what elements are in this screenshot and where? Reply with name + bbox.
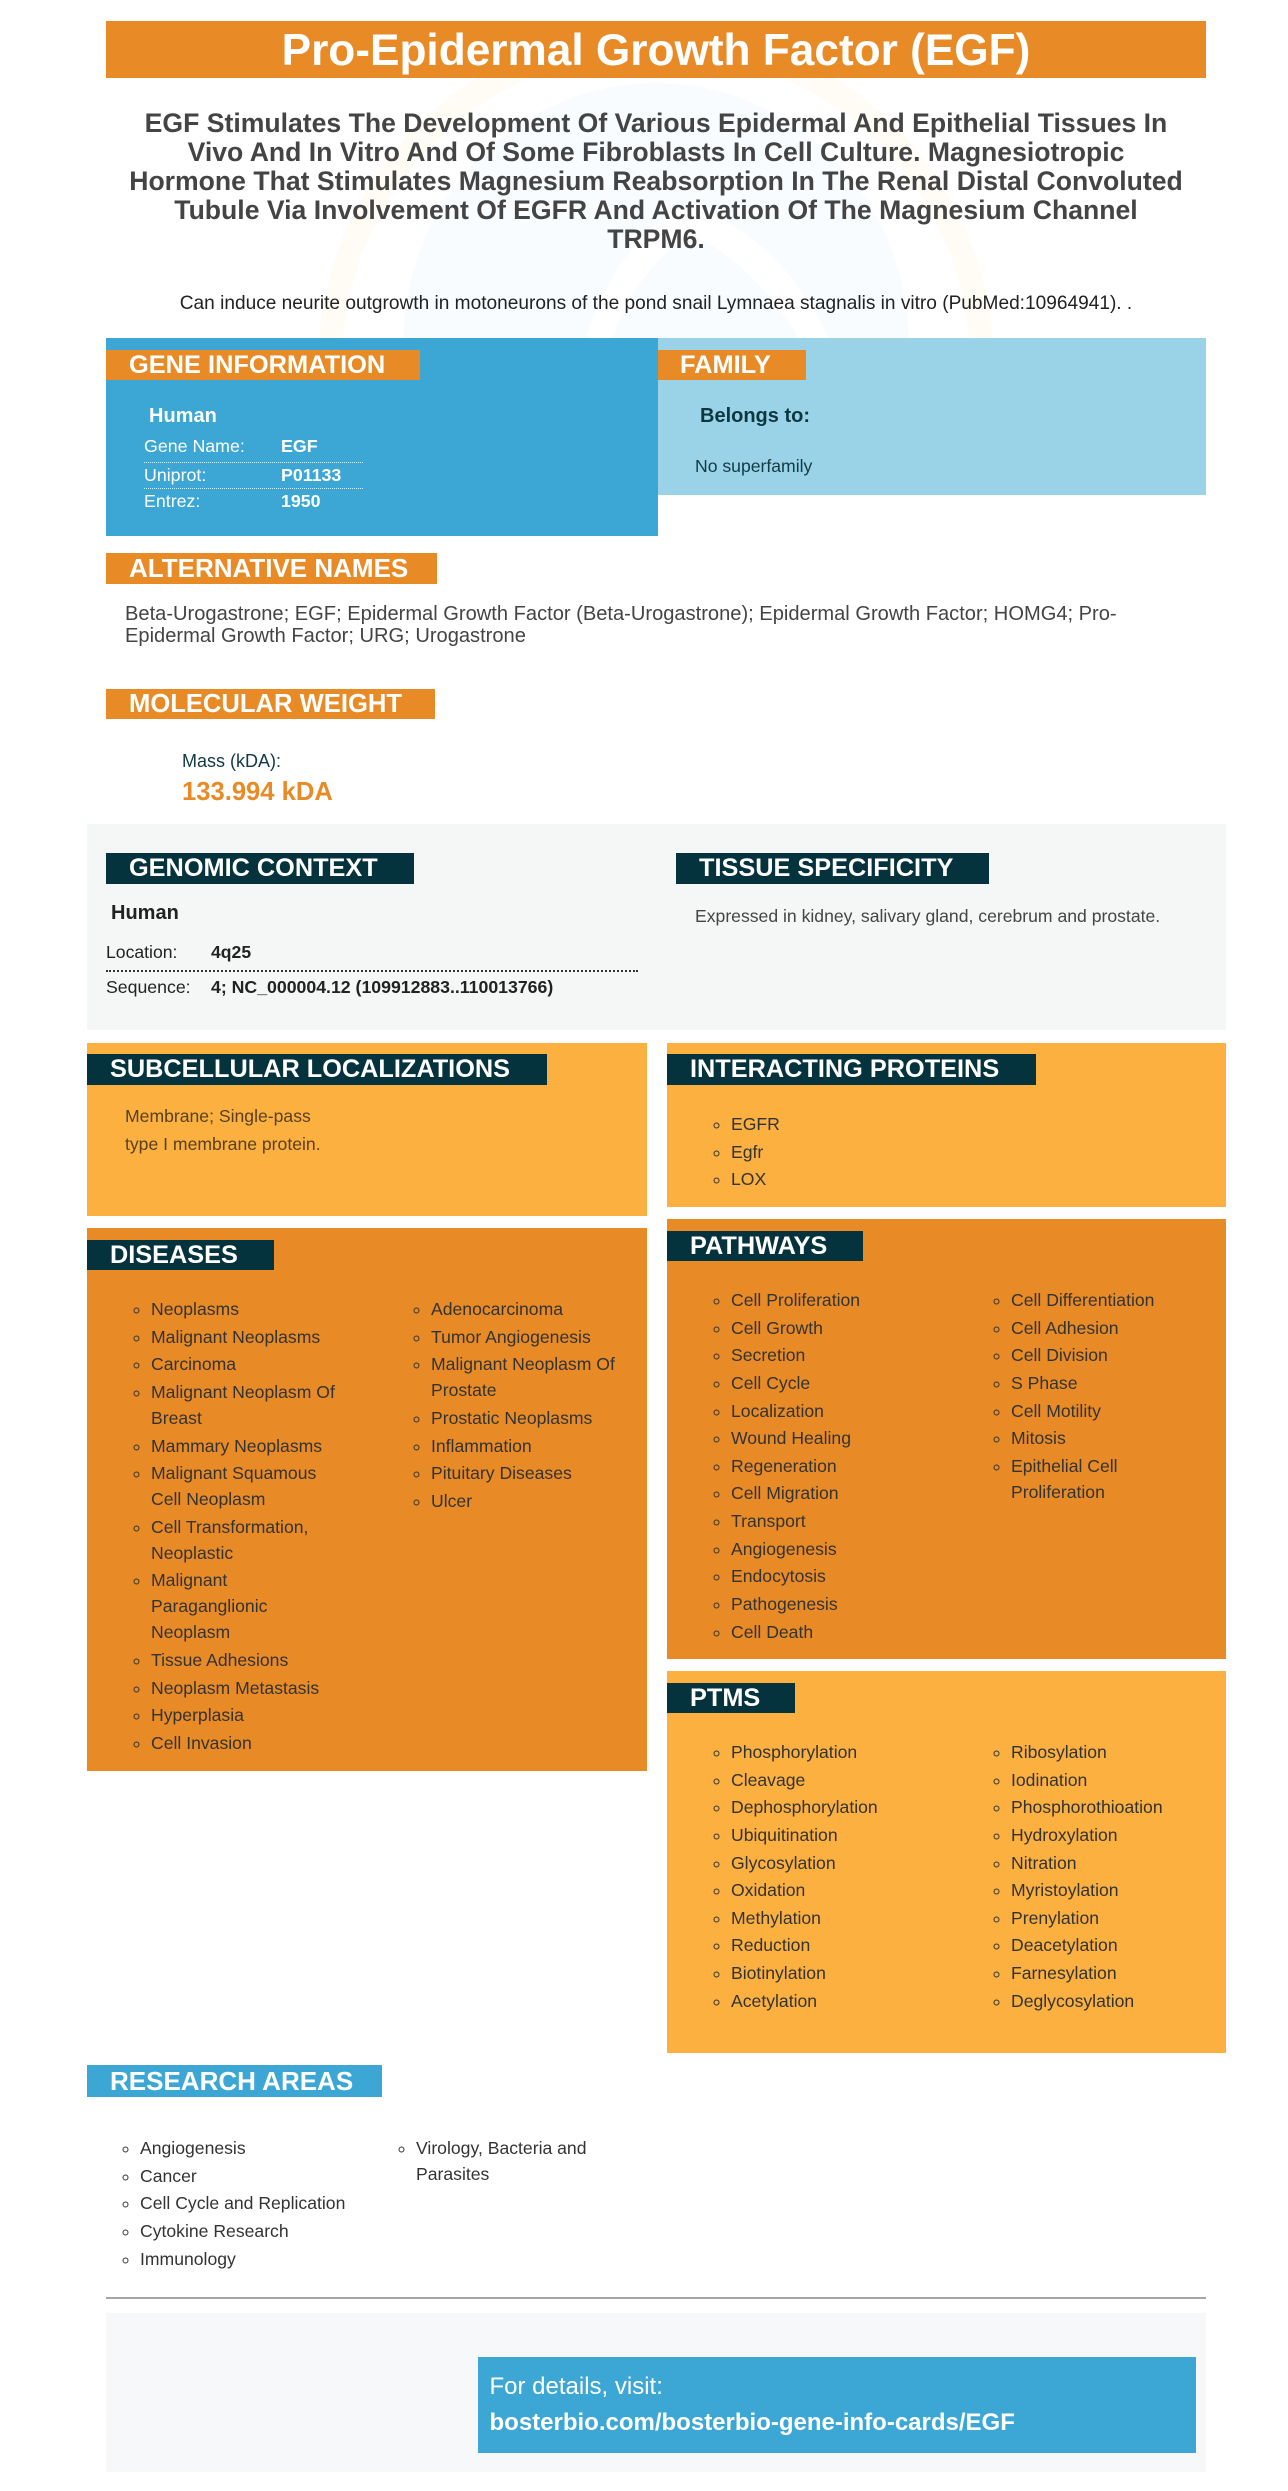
panel: footer [106,2313,1206,2472]
heading: ptms: PTMS [690,1684,760,1712]
location row: Location: [106,942,177,962]
disease list column 1: Malignant Neoplasm Of Breast [151,1382,335,1428]
gene name row: Gene Name: [144,436,245,456]
description [129,108,1183,254]
title: Pro-Epidermal Growth Factor (EGF) [282,26,1030,75]
panel: ptms [667,1671,1226,2053]
disease list column 1: Malignant Paraganglionic Neoplasm [151,1570,267,1642]
pathway list column 1: Transport [731,1511,806,1531]
pathway list column 1: Cell Migration [731,1483,839,1503]
panel: family [658,338,1206,495]
pathway list column 1 [714,1290,860,1642]
ptm list column 2: Phosphorothioation [1011,1797,1163,1817]
ptm list column 1: Phosphorylation [731,1742,857,1762]
heading: molecular weight: MOLECULAR WEIGHT [129,690,402,718]
pathway list column 1: Regeneration [731,1456,837,1476]
visit label: For details, visit: [490,2373,663,2400]
heading: pathways: PATHWAYS [690,1232,827,1260]
species label: Human [149,405,217,427]
pathway list column 1: Cell Cycle [731,1373,810,1393]
species label: Human [111,902,179,924]
watermark logo [320,78,992,338]
tissue specificity text: Expressed in kidney, salivary gland, cerebrum and prostate. [695,906,1160,926]
disease list column 2: Inflammation [431,1436,532,1456]
disease list column 2: Adenocarcinoma [431,1299,563,1319]
heading: gene information: GENE INFORMATION [129,351,385,379]
protein list: LOX [731,1169,766,1189]
ptm list column 1: Oxidation [731,1880,805,1900]
localization text: type I membrane protein. [125,1134,321,1154]
description: Hormone That Stimulates Magnesium Reabsorption In The Renal Distal Convoluted [129,166,1183,196]
description: TRPM6. [607,224,705,254]
panel: gene information [106,338,658,536]
localization text [125,1106,321,1154]
ptm list column 1: Methylation [731,1908,821,1928]
mass value: 133.994 kDA [182,778,333,806]
ptm list column 1: Dephosphorylation [731,1797,878,1817]
function note: Can induce neurite outgrowth in motoneurons of the pond snail Lymnaea stagnalis in vitro (PubMed:10964941). . [180,293,1132,314]
location row [106,942,251,962]
gene name row [144,436,318,456]
mass label: Mass (kDA): [182,751,281,771]
research list column 1: Cell Cycle and Replication [140,2193,345,2213]
pathway list column 1: Endocytosis [731,1566,826,1586]
heading: alternative names: ALTERNATIVE NAMES [129,553,408,583]
callout: details link [478,2357,1196,2453]
gene name row: EGF [281,436,318,456]
alternative names text: Beta-Urogastrone; EGF; Epidermal Growth Factor (Beta-Urogastrone); Epidermal Growth Factor; HOMG4; Pro-Epidermal Growth Factor; URG; Urogastrone [125,603,1117,647]
belongs to label: Belongs to: [700,405,810,427]
heading: ptms [667,1683,795,1713]
disease list column 1: Neoplasm Metastasis [151,1678,319,1698]
panel: subcellular localizations [87,1043,647,1216]
pathway list column 1: Cell Proliferation [731,1290,860,1310]
description: Vivo And In Vitro And Of Some Fibroblasts In Cell Culture. Magnesiotropic [188,137,1124,167]
url: bosterbio.com/bosterbio-gene-info-cards/EGF [490,2409,1015,2436]
pathway list column 1: Cell Death [731,1622,813,1642]
pathway list column 2: Cell Motility [1011,1401,1101,1421]
pathway list column 1: Secretion [731,1345,805,1365]
pathway list column 1: Localization [731,1401,824,1421]
disease list column 1: Cell Transformation, Neoplastic [151,1517,308,1563]
pathway list column 2: Mitosis [1011,1428,1066,1448]
heading: pathways [667,1231,863,1261]
title [106,21,1206,78]
entrez row: Entrez: [144,491,200,511]
panel: interacting proteins [667,1043,1226,1207]
protein list [714,1114,780,1189]
disease list column 1: Malignant Neoplasms [151,1327,320,1347]
protein list: EGFR [731,1114,780,1134]
research list column 1: Cytokine Research [140,2221,289,2241]
description: Tubule Via Involvement Of EGFR And Activation Of The Magnesium Channel [174,195,1138,225]
sequence row: Sequence: [106,977,191,997]
pathway list column 2: Cell Adhesion [1011,1318,1119,1338]
disease list column 1: Cell Invasion [151,1733,252,1753]
panel: genomic context and tissue specificity [87,824,1226,1030]
ptm list column 2: Hydroxylation [1011,1825,1118,1845]
heading: family: FAMILY [680,351,771,379]
panel: diseases [87,1228,647,1771]
ptm list column 2: Myristoylation [1011,1880,1119,1900]
entrez row [144,491,321,511]
pathway list column 1: Pathogenesis [731,1594,838,1614]
ptm list column 2: Deacetylation [1011,1935,1118,1955]
research list column 1 [122,2138,345,2269]
disease list column 2: Ulcer [431,1491,472,1511]
heading: family [658,350,806,380]
ptm list column 2: Farnesylation [1011,1963,1117,1983]
ptm list column 1: Cleavage [731,1770,805,1790]
research list column 2: Virology, Bacteria and Parasites [416,2138,586,2184]
disease list column 1 [134,1299,335,1753]
heading: subcellular localizations: SUBCELLULAR LOCALIZATIONS [110,1055,510,1083]
disease list column 2: Prostatic Neoplasms [431,1408,592,1428]
pathway list column 1: Wound Healing [731,1428,851,1448]
entrez row: 1950 [281,491,321,511]
heading: diseases [87,1240,274,1270]
disease list column 1: Neoplasms [151,1299,239,1319]
pathway list column 2: Epithelial Cell Proliferation [1011,1456,1118,1502]
location row: 4q25 [211,942,251,962]
heading: diseases: DISEASES [110,1241,238,1269]
pathway list column 2: Cell Differentiation [1011,1290,1154,1310]
pathway list column 2: Cell Division [1011,1345,1108,1365]
research list column 1: Cancer [140,2166,197,2186]
disease list column 1: Malignant Squamous Cell Neoplasm [151,1463,316,1509]
ptm list column 1: Glycosylation [731,1853,836,1873]
disease list column 2: Pituitary Diseases [431,1463,572,1483]
protein list: Egfr [731,1142,763,1162]
ptm list column 2 [994,1742,1163,2011]
disease list column 1: Mammary Neoplasms [151,1436,322,1456]
heading: tissue specificity: TISSUE SPECIFICITY [699,854,953,882]
pathway list column 1: Cell Growth [731,1318,823,1338]
ptm list column 1 [714,1742,878,2011]
disease list column 1: Hyperplasia [151,1705,244,1725]
disease list column 1: Tissue Adhesions [151,1650,288,1670]
heading: interacting proteins: INTERACTING PROTEINS [690,1055,999,1083]
localization text: Membrane; Single-pass [125,1106,311,1126]
ptm list column 1: Ubiquitination [731,1825,838,1845]
panel: pathways [667,1219,1226,1659]
research list column 1: Immunology [140,2249,236,2269]
disease list column 2 [414,1299,615,1511]
family value: No superfamily [695,456,812,476]
pathway list column 2 [994,1290,1154,1502]
pathway list column 2: S Phase [1011,1373,1078,1393]
uniprot row [144,465,341,485]
research list column 1: Angiogenesis [140,2138,246,2158]
disease list column 1: Carcinoma [151,1354,236,1374]
disease list column 2: Tumor Angiogenesis [431,1327,591,1347]
ptm list column 1: Acetylation [731,1991,817,2011]
description: EGF Stimulates The Development Of Various Epidermal And Epithelial Tissues In [145,108,1167,138]
ptm list column 2: Ribosylation [1011,1742,1107,1762]
ptm list column 2: Prenylation [1011,1908,1099,1928]
ptm list column 2: Iodination [1011,1770,1087,1790]
ptm list column 2: Nitration [1011,1853,1077,1873]
ptm list column 1: Reduction [731,1935,810,1955]
sequence row: 4; NC_000004.12 (109912883..110013766) [211,977,553,997]
pathway list column 1: Angiogenesis [731,1539,837,1559]
heading: genomic context: GENOMIC CONTEXT [129,854,378,882]
ptm list column 2: Deglycosylation [1011,1991,1134,2011]
ptm list column 1: Biotinylation [731,1963,826,1983]
uniprot row: P01133 [281,465,341,485]
heading: research areas: RESEARCH AREAS [110,2066,353,2096]
uniprot row: Uniprot: [144,465,206,485]
disease list column 2: Malignant Neoplasm Of Prostate [431,1354,615,1400]
